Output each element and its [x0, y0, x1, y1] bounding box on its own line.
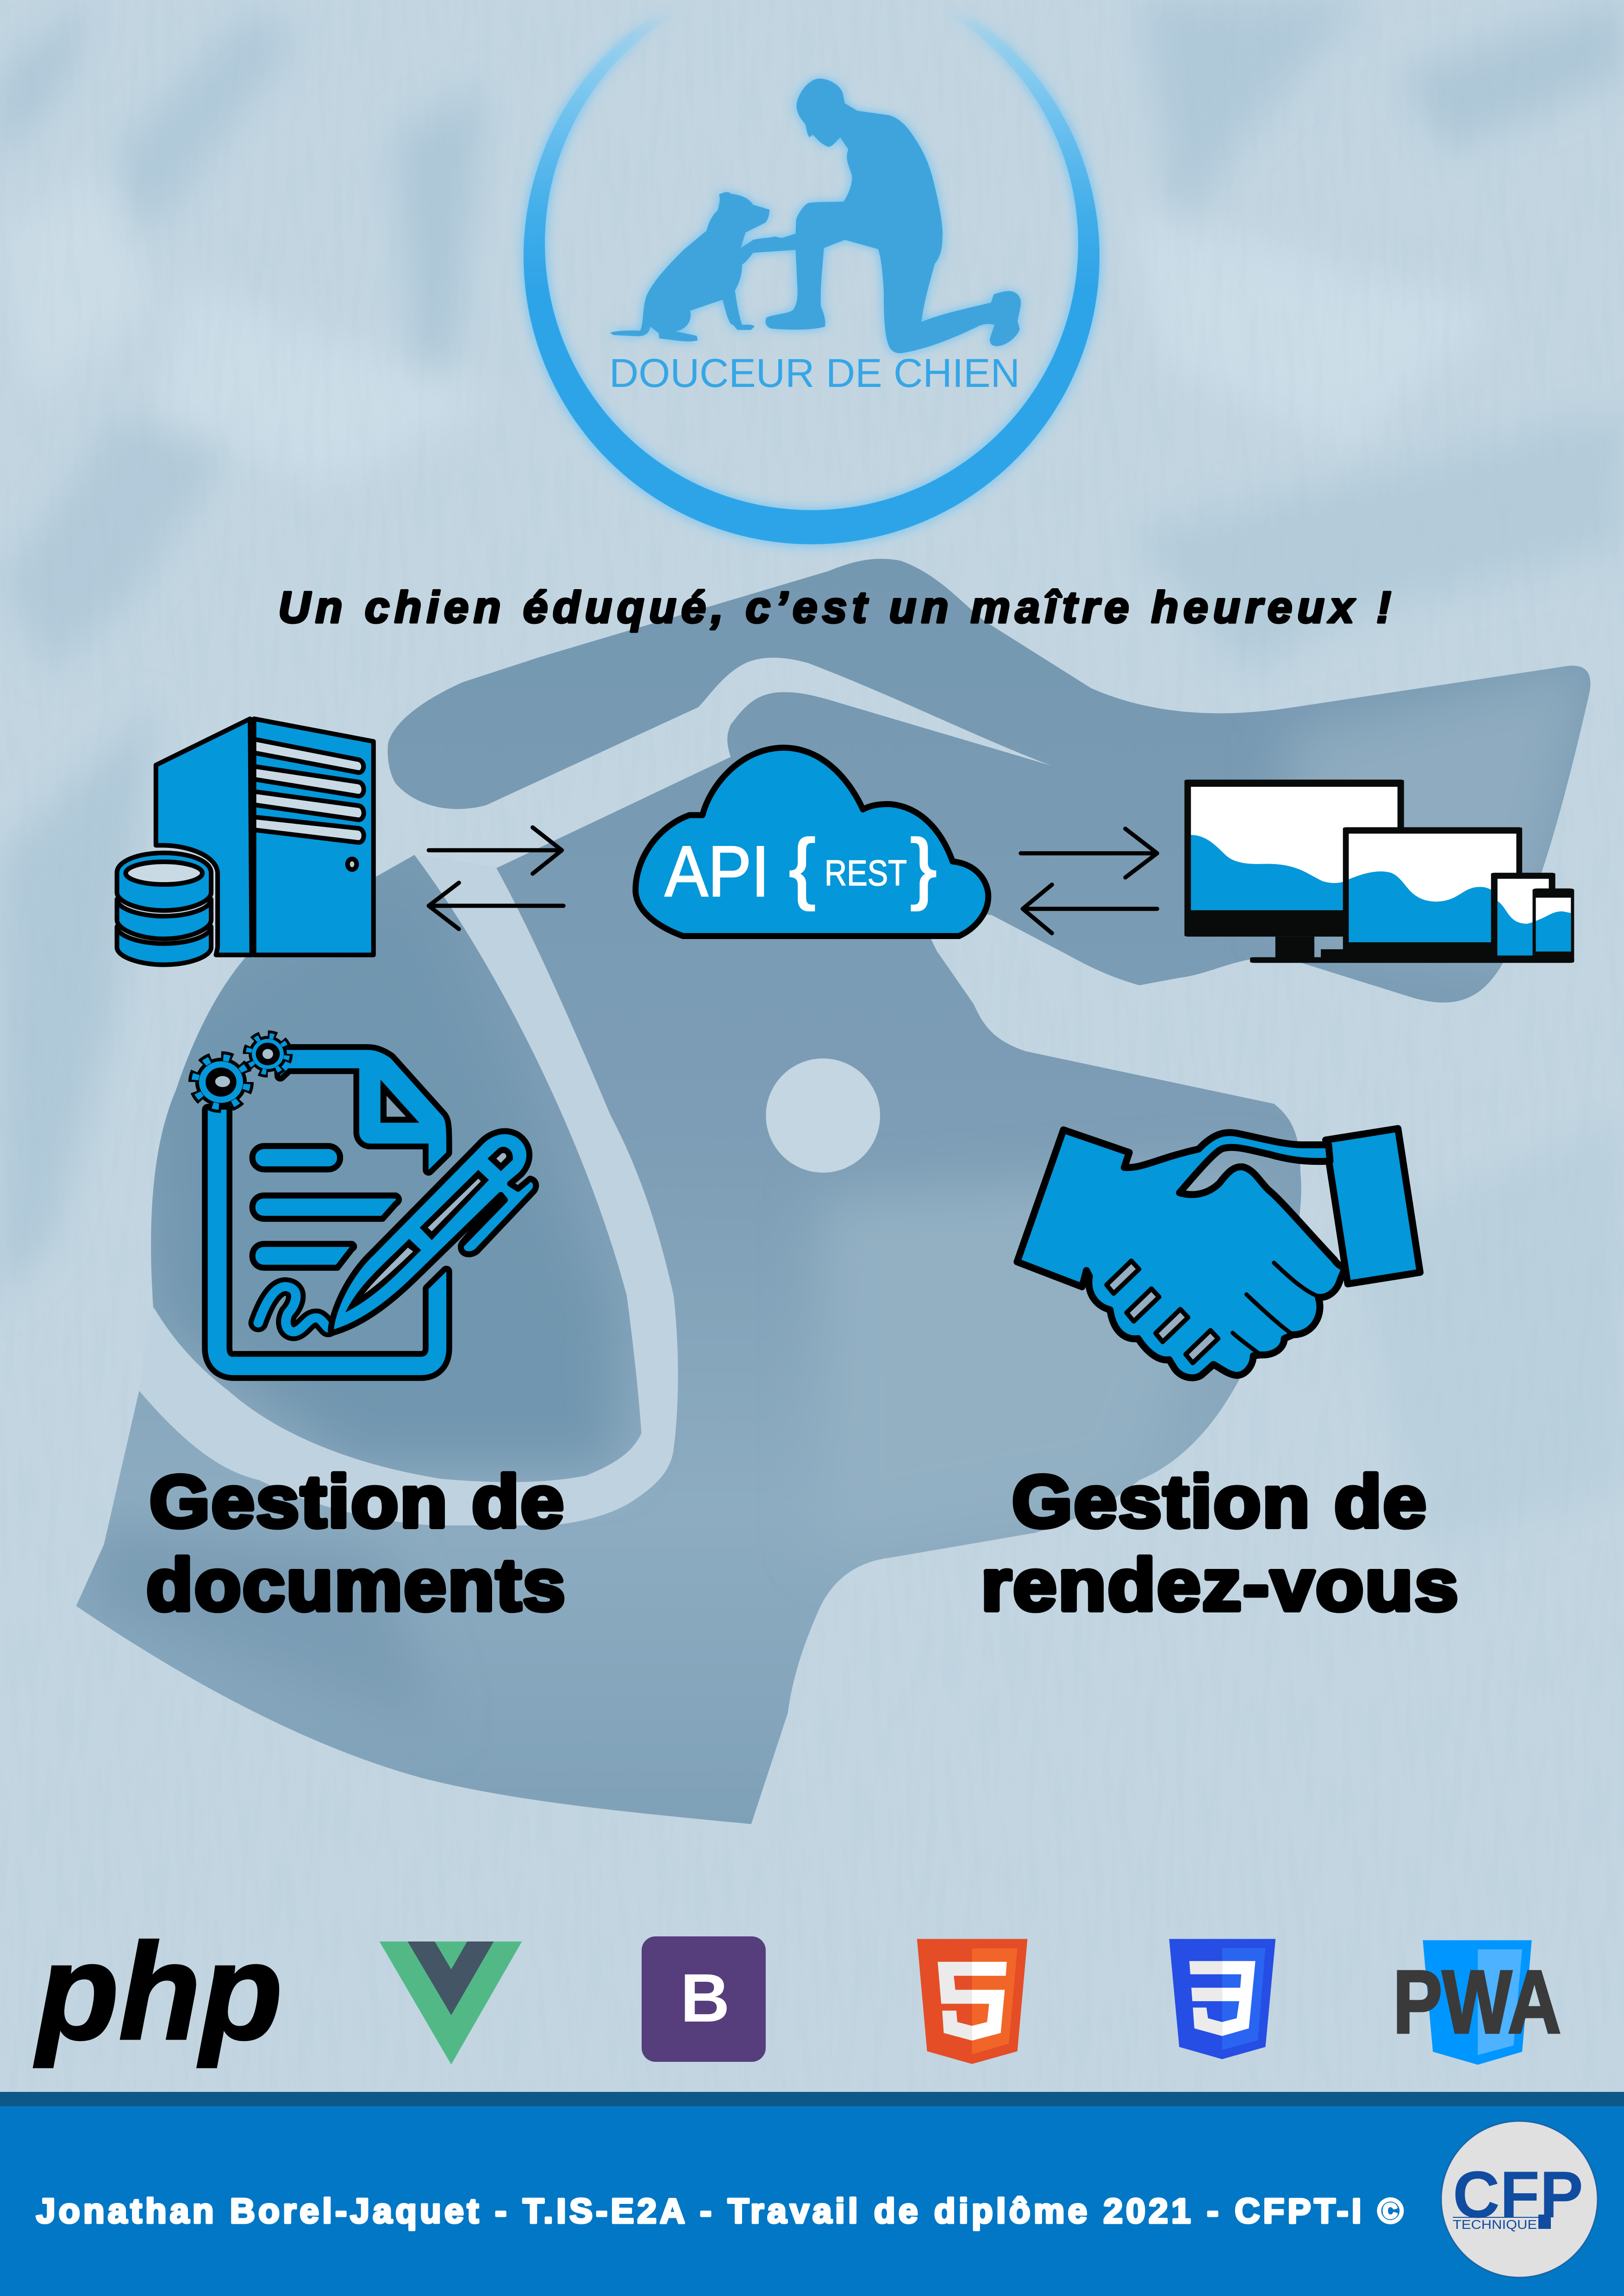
heading: Gestion de documents: Gestion de	[150, 1460, 565, 1543]
ear outline band	[139, 855, 678, 1525]
icon: API REST cloud: {	[789, 823, 815, 911]
document frame	[208, 1110, 446, 1375]
background graduate dog head silhouette	[76, 559, 1596, 1824]
eye	[766, 1058, 880, 1173]
logo: CFP Technique	[1441, 2121, 1598, 2277]
icon: API REST cloud: REST	[824, 852, 907, 893]
tagline: Un chien éduqué, c’est un maître heureux !	[278, 583, 1391, 632]
logo: Douceur de Chien	[524, 0, 1099, 544]
icon: document with pen and gears	[195, 1036, 536, 1375]
logo: Bootstrap	[642, 1936, 766, 2062]
icon: responsive devices	[1184, 780, 1574, 963]
gears	[195, 1036, 287, 1107]
footer credit: Jonathan Borel-Jaquet - T.IS-E2A - Travail de diplôme 2021 - CFPT-I ©	[36, 2191, 1403, 2230]
icon: API REST cloud: }	[911, 823, 937, 911]
arrows: server to API	[429, 828, 563, 929]
man and dog silhouette	[610, 79, 1021, 353]
right sleeve	[1325, 1128, 1420, 1284]
heading: Gestion de rendez-vous	[981, 1460, 1460, 1626]
finger gaps	[1106, 1261, 1218, 1363]
icon: API REST cloud: API	[665, 831, 769, 911]
phone	[1491, 873, 1555, 958]
tonal variation inside the head	[88, 659, 1596, 1728]
signature	[258, 1287, 328, 1332]
monitor	[1184, 780, 1404, 958]
heading: Gestion de documents	[146, 1460, 567, 1626]
icon: API REST cloud	[636, 748, 988, 936]
heading: Gestion de rendez-vous: Gestion de	[1012, 1460, 1428, 1543]
logo: HTML5	[917, 1939, 1027, 2064]
icon: server and database	[117, 719, 374, 965]
pen	[331, 1131, 536, 1333]
fold triangle	[381, 1080, 419, 1123]
logo: PWA	[1393, 1940, 1561, 2065]
icon: handshake	[1017, 1128, 1420, 1378]
logo: CFP Technique: CFP	[1453, 2158, 1583, 2232]
logo: CFP Technique: TECHNIQUE	[1453, 2217, 1537, 2232]
footer band	[0, 2092, 1624, 2296]
logo: CSS3	[1169, 1939, 1275, 2059]
logo: PWA: PWA	[1393, 1952, 1561, 2052]
small phone	[1532, 889, 1574, 963]
document top and fold	[279, 1050, 446, 1170]
logo ring	[524, 0, 1099, 544]
logo: Vue	[380, 1941, 522, 2065]
logo wordmark: DOUCEUR DE CHIEN	[609, 351, 1020, 396]
logo: Bootstrap: B	[681, 1960, 730, 2036]
heading: Gestion de rendez-vous: rendez-vous	[981, 1543, 1460, 1626]
base	[1250, 957, 1574, 963]
clasped hands	[1017, 1130, 1345, 1378]
tablet	[1343, 827, 1522, 958]
logo: PHP: php	[33, 1915, 282, 2069]
heading: Gestion de documents: documents	[146, 1543, 567, 1626]
finger lines	[1233, 1263, 1321, 1355]
text lines	[252, 1146, 399, 1268]
arrows: API to devices	[1021, 829, 1157, 933]
